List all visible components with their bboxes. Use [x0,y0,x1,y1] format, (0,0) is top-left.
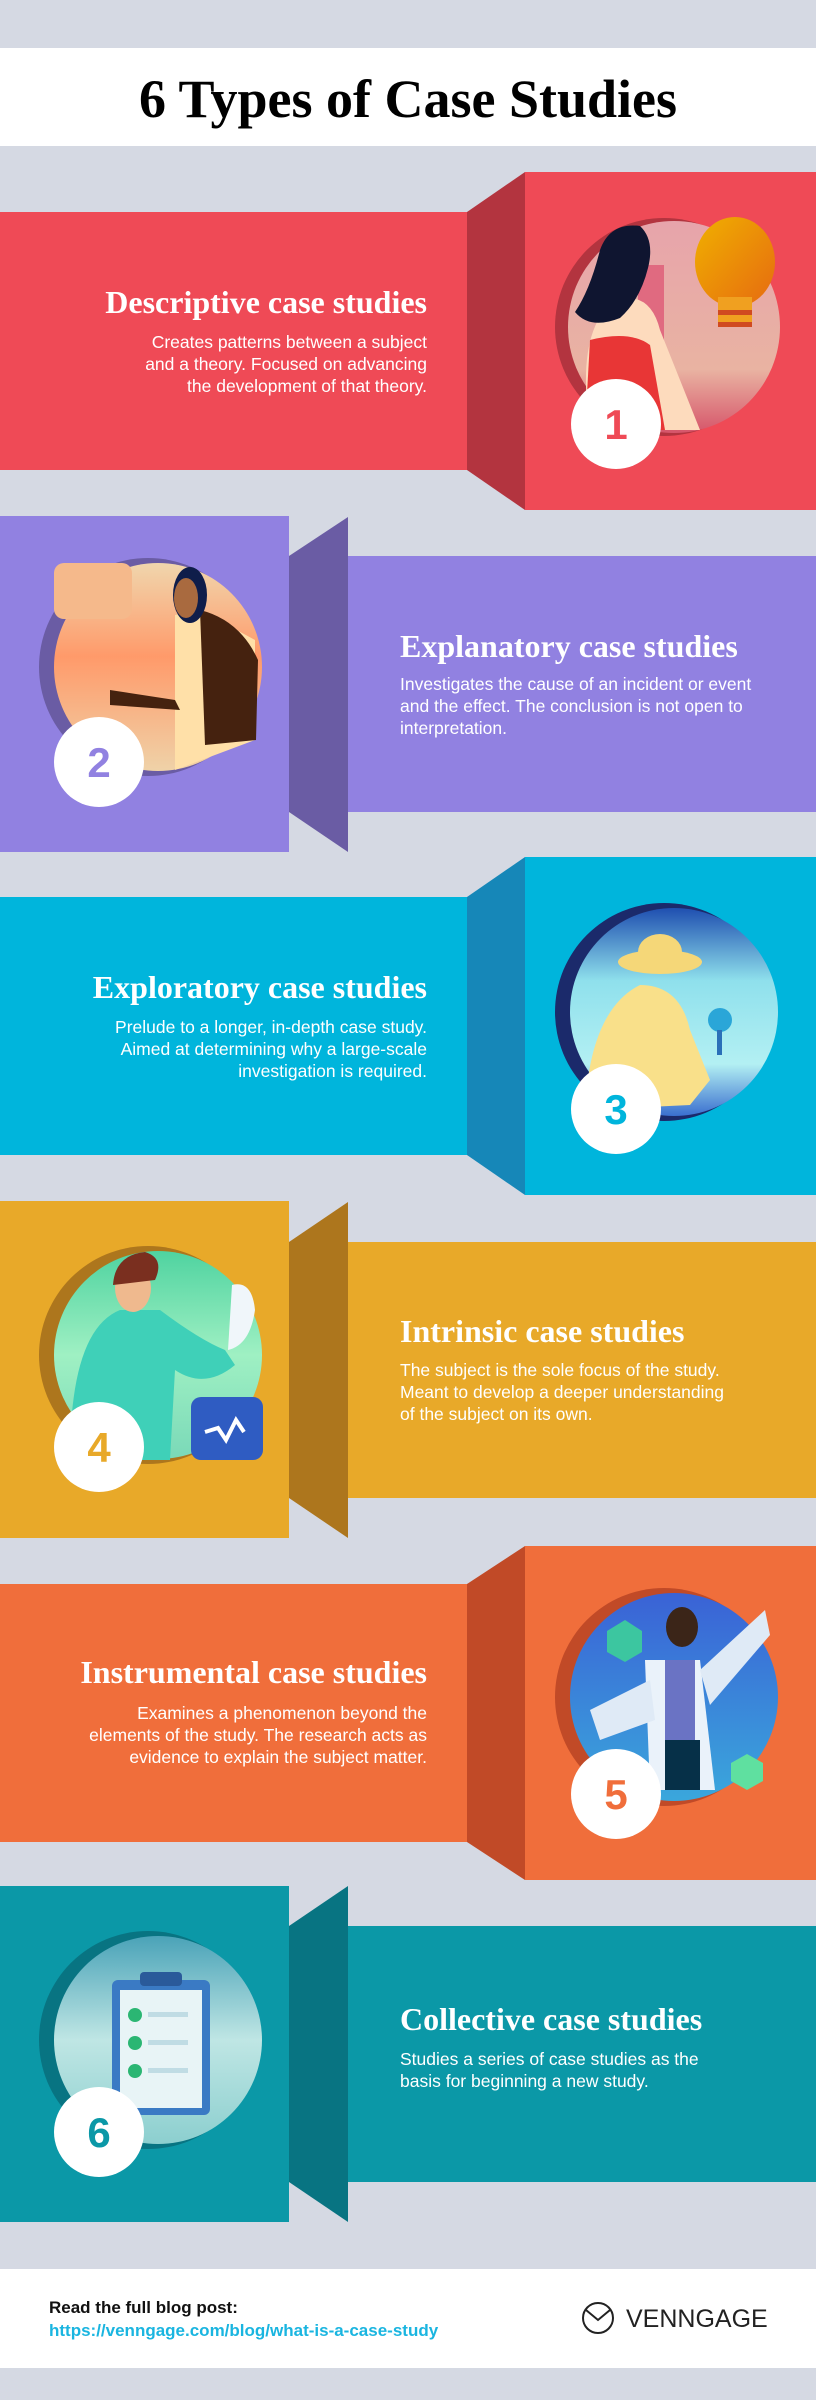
text 2: Investigates the cause of an incident or event [400,674,751,694]
text 4: Meant to develop a deeper understanding [400,1382,724,1402]
title bar [0,48,816,146]
illustration 4: doctor [39,1246,263,1464]
panel 5: instrumental [0,1546,816,1880]
text 4: The subject is the sole focus of the study. [400,1360,720,1380]
illustration 6: clipboard [39,1931,262,2149]
panel 4: intrinsic [0,1201,816,1538]
footer [0,2269,816,2368]
panel 2: explanatory [0,516,816,852]
heading 2: Explanatory case studies [400,628,738,664]
number 2 [54,717,144,807]
number 1 [571,379,661,469]
number 6 [54,2087,144,2177]
text 3: Prelude to a longer, in-depth case study. [115,1017,427,1037]
number 6: 6 [87,2109,111,2156]
text 2: and the effect. The conclusion is not open to [400,696,743,716]
text 1: and a theory. Focused on advancing [145,354,427,374]
text 1: Creates patterns between a subject [152,332,427,352]
heading 3: Exploratory case studies [93,969,427,1005]
heading 1: Descriptive case studies [105,284,427,320]
number 4: 4 [87,1424,111,1471]
text 6: Studies a series of case studies as the [400,2049,699,2069]
text 6: basis for beginning a new study. [400,2071,649,2091]
illustration 1: woman and lightbulb [555,217,780,436]
heading 4: Intrinsic case studies [400,1313,684,1349]
text 3: Aimed at determining why a large-scale [121,1039,427,1059]
text 3: investigation is required. [238,1061,427,1081]
number 3 [571,1064,661,1154]
illustration 5: scientist [555,1588,778,1806]
number 1: 1 [604,401,628,448]
title: 6 Types of Case Studies [139,69,677,129]
logo: VENNGAGE [626,2305,768,2333]
panel 1: descriptive [0,172,816,510]
text 5: evidence to explain the subject matter. [129,1747,427,1767]
footer text: Read the full blog post: [49,2298,238,2317]
number 3: 3 [604,1086,628,1133]
text 1: the development of that theory. [187,376,427,396]
text 2: interpretation. [400,718,507,738]
text 5: elements of the study. The research acts as [89,1725,427,1745]
panel 6: collective [0,1886,816,2222]
footer link: https://venngage.com/blog/what-is-a-case-study [49,2321,439,2340]
heading 5: Instrumental case studies [80,1654,427,1690]
panel 3: exploratory [0,857,816,1195]
heading 6: Collective case studies [400,2001,702,2037]
number 5: 5 [604,1771,628,1818]
text 5: Examines a phenomenon beyond the [137,1703,427,1723]
text 4: of the subject on its own. [400,1404,593,1424]
illustration 3: explorer with magnifier [555,903,778,1121]
number 5 [571,1749,661,1839]
number 4 [54,1402,144,1492]
number 2: 2 [87,739,111,786]
illustration 2: man with speech bubble [39,558,262,776]
